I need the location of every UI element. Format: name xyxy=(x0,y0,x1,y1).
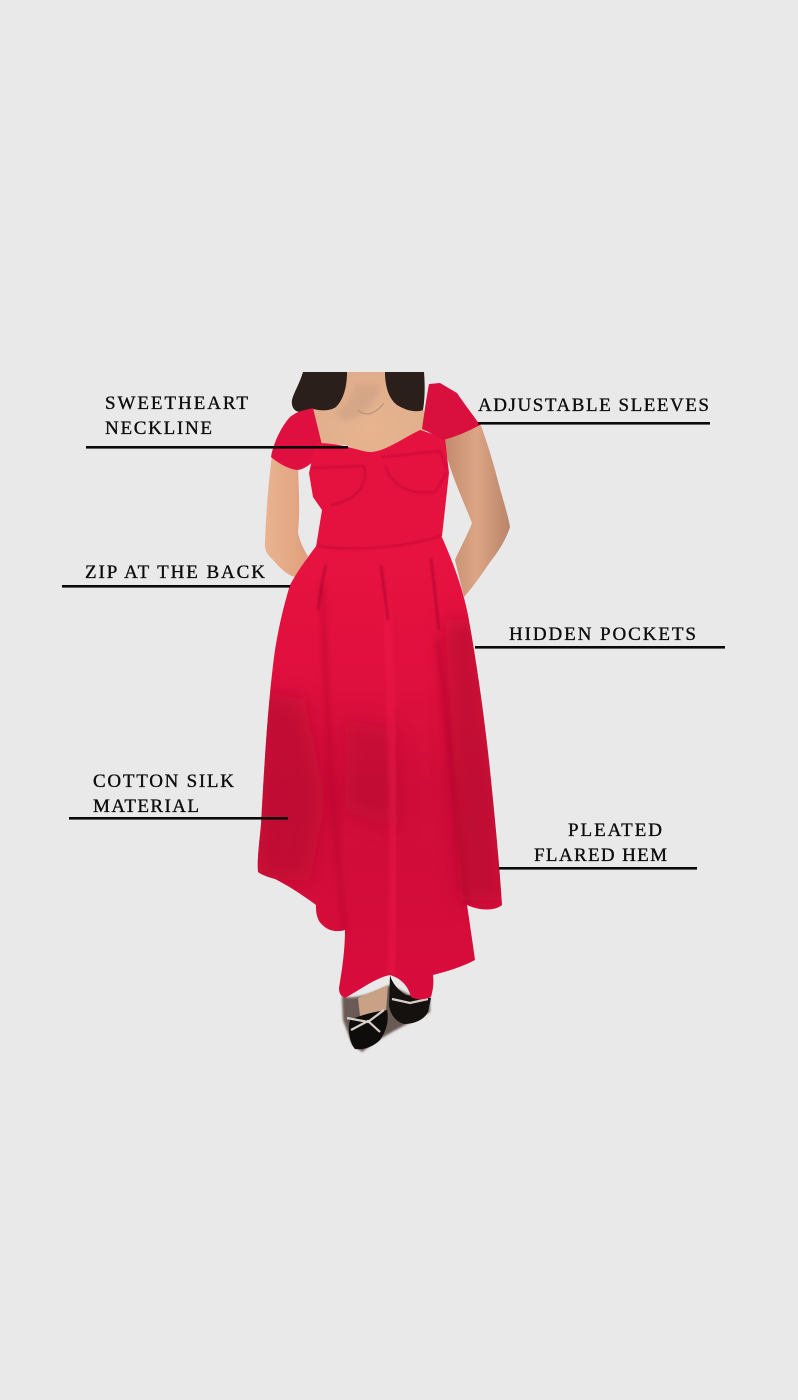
left sleeve xyxy=(271,408,322,470)
label: sweetheart neckline xyxy=(86,393,348,449)
label: pleated flared hem: FLARED HEM xyxy=(534,845,667,866)
right arm xyxy=(443,423,510,597)
bodice xyxy=(309,430,449,549)
label: hidden pockets: HIDDEN POCKETS xyxy=(509,624,696,645)
infographic canvas xyxy=(62,372,725,1053)
label: pleated flared hem xyxy=(499,820,697,870)
label: zip at the back: ZIP AT THE BACK xyxy=(85,562,265,583)
neck shadow and necklace xyxy=(336,385,384,421)
hair xyxy=(292,372,425,413)
left arm xyxy=(265,455,308,577)
label: pleated flared hem: PLEATED xyxy=(568,820,662,841)
shoes and feet xyxy=(342,975,431,1052)
right sleeve xyxy=(422,383,480,440)
label: sweetheart neckline: NECKLINE xyxy=(105,418,212,439)
label: cotton silk material xyxy=(69,771,288,820)
figure: woman in red dress xyxy=(255,372,510,1052)
neck and chest skin xyxy=(313,372,426,453)
bodice seams xyxy=(311,451,447,549)
label: cotton silk material: COTTON SILK xyxy=(93,771,234,792)
skirt xyxy=(258,535,502,999)
label: sweetheart neckline: SWEETHEART xyxy=(105,393,248,414)
skirt folds xyxy=(255,558,505,975)
label: adjustable sleeves: ADJUSTABLE SLEEVES xyxy=(478,395,709,416)
label: cotton silk material: MATERIAL xyxy=(93,796,199,817)
